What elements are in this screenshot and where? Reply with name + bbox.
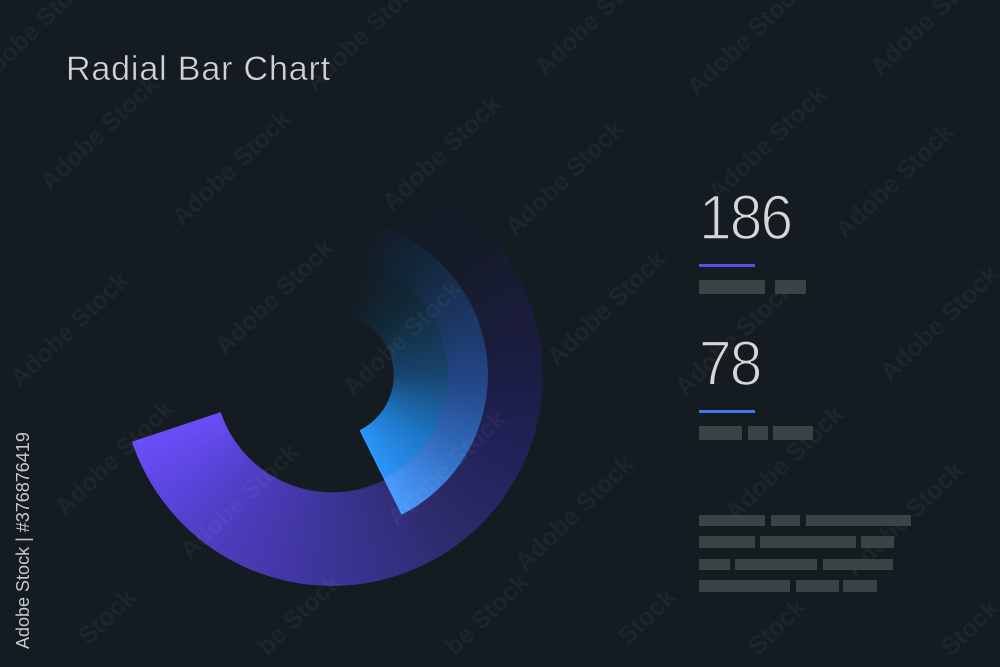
watermark layer: Adobe Stock [50,395,179,521]
watermark layer: Stock [73,583,141,651]
watermark layer: Stock [613,583,681,651]
middle blue radial bar [376,231,488,514]
placeholder label [699,426,813,440]
stat: 186 [699,183,806,294]
radial bar chart [132,230,543,586]
title: Radial Bar Chart [66,50,331,88]
blue underline [699,410,755,413]
vertical credit text: Adobe Stock | #376876419 [13,432,33,649]
watermark layer: Adobe Stock [5,266,134,392]
stat: 78 [699,329,813,440]
placeholder label [699,280,806,294]
watermark layer: Adobe Stock [35,70,164,196]
inner blue radial bar [360,272,448,478]
watermark layer: Adobe Stock [382,405,511,531]
watermark layer: Adobe Stock [500,115,629,241]
watermark layer: Adobe Stock [703,80,832,206]
watermark layer: Adobe Stock [720,400,849,526]
watermark layer: Adobe Stock [510,450,639,576]
watermark layer: Adobe Stock [377,90,506,216]
watermark layer: Adobe Stock [830,118,959,244]
watermark layer: Adobe Stock [167,105,296,231]
watermark layer: Stock [743,593,811,661]
number 186: 186 [699,183,791,253]
watermark layer: Adobe Stock [840,456,969,582]
watermark layer: Adobe Stock [210,234,339,360]
watermark layer: be Stock [252,568,346,661]
purple underline [699,264,755,267]
watermark layer: Adobe Stock [542,245,671,371]
watermark layer: be Stock [440,568,534,661]
watermark layer: Adobe Stock [670,275,799,401]
watermark layer: Adobe Stock [338,275,467,401]
outer purple radial bar [132,240,543,586]
placeholder text block [699,515,911,592]
watermark layer: Adobe Stock [175,438,304,564]
number 78: 78 [699,329,760,399]
